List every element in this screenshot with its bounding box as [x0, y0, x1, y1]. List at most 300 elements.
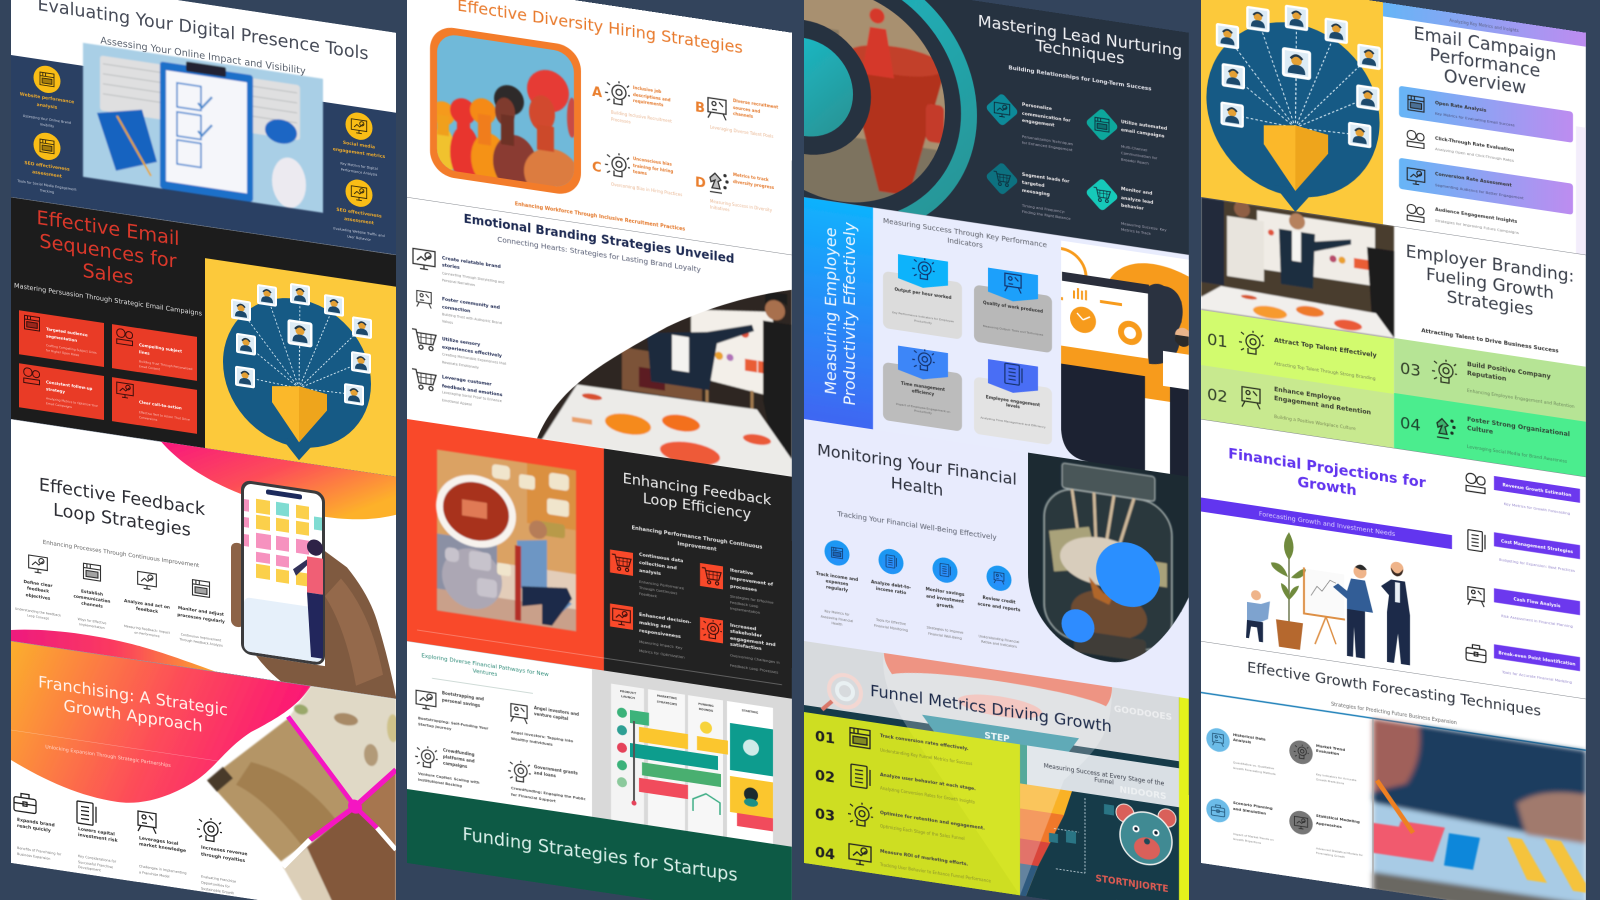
- item: Lowers capital investment risk: investment risk: [78, 832, 119, 844]
- item: Increased stakeholder engagement and satisfaction: engagement and: [730, 635, 776, 648]
- card: Audience Engagement Insights: Audience Engagement Insights: [1435, 207, 1517, 225]
- item: Leverage customer feedback and emotions: Emotional Appeal: [442, 398, 472, 407]
- card: Open Rate Analysis: Key Metrics for Evaluating Email Success: [1435, 110, 1515, 127]
- card: Quality of work produced: Measuring Output: Tools and Techniques: [983, 324, 1044, 337]
- item: Leverages local market knowledge: [138, 811, 187, 881]
- card: Time management efficiency: [883, 343, 962, 432]
- decorative ring and funnel photo: [701, 0, 977, 254]
- card: Quality of work produced: [974, 266, 1052, 353]
- item: Enhanced decision-making and responsiveness: [610, 603, 691, 661]
- title: Financial Projections for: [1228, 446, 1427, 492]
- item: Enhanced decision-making and responsiveness: Measuring Impact: Key: [639, 639, 683, 650]
- title: Employer Branding:: [1406, 242, 1574, 287]
- subtitle: Attracting Talent to Drive Business Success: [1421, 328, 1559, 355]
- item: Track income and expenses regularly: expenses: [826, 579, 849, 588]
- item: Segment leads for targeted messaging: Finding the Right Balance: [1022, 209, 1071, 221]
- block 04: Foster Strong Organizational Culture: Culture: [1467, 425, 1493, 436]
- photo: clipboard on desk: [83, 43, 323, 213]
- decorative wave: bottom left: [11, 630, 216, 672]
- card: Clear call-to-action: Effective Text to Action That Drive: [139, 410, 190, 422]
- item: Expands brand reach quickly: reach quickly: [17, 823, 51, 834]
- faint poster lettering: [984, 685, 1172, 803]
- item D: Metrics to track diversity progress: [695, 166, 775, 219]
- right metric: SEO effectiveness assessment: User Behavior: [347, 234, 372, 242]
- block 01: Attract Top Talent Effectively: Attracting Top Talent Through Strong Branding: [1274, 361, 1376, 382]
- card: Consistent follow-up strategy: strategy: [46, 386, 65, 394]
- item: Foster community and connection: connection: [442, 304, 470, 314]
- item: Personalize communication for engagement: for Enhanced Engagement: [1022, 140, 1073, 152]
- subtitle: Building Relationships for Long-Term Success: [1008, 65, 1152, 93]
- item: Define clear feedback objectives: Understanding the Feedback: [15, 607, 61, 618]
- card: Employee engagement levels: levels: [1006, 402, 1020, 409]
- item: Angel investors and venture capital: [511, 702, 579, 751]
- panel: Enhancing Feedback Loop Efficiency: [407, 419, 792, 699]
- item 04: Measure ROI of marketing efforts: [815, 839, 991, 887]
- item: Lowers capital investment risk: Successful Franchise: [78, 860, 113, 869]
- item: Personalize communication for engagement: communication for: [1022, 111, 1071, 124]
- item: Statistical Modeling Approaches: [1289, 809, 1364, 862]
- subtitle: Assessing Your Online Impact and Visibility: [100, 35, 306, 77]
- card: Output per hour worked: [883, 252, 962, 340]
- item 01: Track conversion rates effectively: Understanding Key Funnel Metrics for Success: [880, 747, 972, 766]
- item: Create relatable brand stories: stories: [442, 262, 460, 271]
- right metric: SEO effectiveness assessment: [334, 180, 384, 241]
- subtitle: Mastering Persuasion Through Strategic Email Campaigns: [14, 281, 203, 318]
- item: Utilize automated email campaigns: Utilize automated: [1121, 119, 1167, 132]
- item: Review credit score and reports: Understanding Financial: [979, 634, 1019, 644]
- item: Statistical Modeling Approaches: Statistical Modeling: [1316, 813, 1360, 824]
- yellow content block: [804, 712, 1020, 895]
- item: Personalize communication for engagement: [985, 90, 1073, 152]
- item: Track income and expenses regularly: regularly: [826, 584, 848, 594]
- item: Market Trend Evaluation: Growth Predictions: [1316, 777, 1345, 786]
- title: Effective Feedback: [39, 475, 206, 520]
- photo: hand holding phone: [231, 478, 396, 699]
- right metric: Social media engagement metrics: Performance Analysis: [341, 167, 377, 177]
- title: Growth: [1297, 475, 1357, 499]
- item: Analyze debt-to-income ratio: Analyze debt-to-: [871, 579, 911, 591]
- item: Increased stakeholder engagement and satisfaction: stakeholder: [730, 628, 763, 639]
- item: Monitor savings and investment growth: and investment: [926, 593, 964, 605]
- illustration: presenter at board: [1036, 237, 1191, 477]
- title: Franchising: A Strategic: [38, 672, 228, 720]
- bear mascot: [1116, 801, 1176, 869]
- photo: man with speech bubbles: [436, 449, 576, 631]
- item: Crowdfunding platforms and campaigns: [415, 743, 480, 791]
- item: Cost Management Strategies: Budgeting for Expansion: Best Practices: [1499, 557, 1575, 573]
- item: Iterative improvement of processes: [700, 563, 774, 617]
- item: Review credit score and reports: score and reports: [978, 601, 1021, 614]
- item D: Metrics to track diversity progress: Initiatives: [710, 204, 730, 212]
- framed photo: profiles of people: [430, 24, 581, 205]
- card: Click-Through Rate Evaluation: [1399, 122, 1573, 179]
- item: Monitor and analyze lead behavior: Monitor and: [1121, 186, 1152, 197]
- item: Monitor and adjust processes regularly: Monitor and adjust: [178, 605, 224, 618]
- block 01: Attract Top Talent Effectively: 01: [1207, 329, 1228, 351]
- item: Monitor savings and investment growth: growth: [936, 602, 954, 610]
- item: Market Trend Evaluation: Evaluation: [1316, 748, 1339, 756]
- item: Government grants and loans: Crowdfunding: Engaging the Public: [511, 786, 586, 801]
- item: Monitor savings and investment growth: Financial Well-Being: [928, 632, 962, 641]
- subtitle: Tracking Your Financial Well-Being Effectively: [836, 509, 997, 542]
- item: Cash Flow Analysis: Cash Flow Analysis: [1513, 596, 1561, 609]
- item: Define clear feedback objectives: [15, 553, 61, 623]
- item: Foster community and connection: Building Trust with Authentic Brand: [442, 312, 502, 325]
- item: Analyze debt-to-income ratio: income ratio: [876, 586, 906, 596]
- item: Increased stakeholder engagement and satisfaction: Increased: [730, 622, 757, 632]
- chart: startup roadmap board: [592, 669, 792, 849]
- item: Increased stakeholder engagement and satisfaction: satisfaction: [730, 641, 762, 652]
- subtitle: Enhancing Processes Through Continuous Improvement: [43, 540, 200, 569]
- item: Define clear feedback objectives: Define clear: [23, 579, 53, 589]
- item: Market Trend Evaluation: [1289, 739, 1356, 787]
- gradient header shape: [11, 641, 311, 803]
- card: Quality of work produced: Quality of work produced: [983, 300, 1043, 314]
- item: Define clear feedback objectives: feedback: [27, 585, 49, 595]
- card: Time management efficiency: Time management: [901, 381, 945, 392]
- item: Statistical Modeling Approaches: Forecasting Growth: [1316, 851, 1345, 859]
- item 03: Optimize for retention and engagement: Optimizing Each Stage of the Sales Funnel: [880, 823, 965, 841]
- item: Continuous data collection and analysis: Continuous data: [639, 552, 683, 564]
- item: Break-even Point Identification: Break-even Point Identification: [1498, 650, 1576, 667]
- title (rotated): [821, 217, 859, 407]
- column 3 of slides: [701, 0, 1191, 900]
- item: Iterative improvement of processes: improvement of: [730, 575, 774, 588]
- chart: startup roadmap board: PRODUCT: [620, 689, 637, 695]
- item: Increases revenue through royalties: Opportunities for: [201, 881, 230, 889]
- item: Segment leads for targeted messaging: targeted: [1022, 180, 1045, 189]
- item: Historical Data Analysis: Growth Forecasting Methods: [1233, 766, 1276, 776]
- item: Angel investors and venture capital: Angel Investors: Tapping into: [511, 730, 573, 743]
- item: Crowdfunding platforms and campaigns: Crowdfunding: [443, 747, 475, 757]
- right metric: SEO effectiveness assessment: SEO effectiveness: [336, 207, 382, 220]
- left metric: Website performance analysis: [20, 66, 74, 128]
- title: Strategies: [1447, 287, 1533, 320]
- card: Open Rate Analysis: Open Rate Analysis: [1435, 100, 1487, 114]
- panel: Funnel Metrics Driving Growth: [804, 641, 1189, 900]
- item: Leverage customer feedback and emotions: Leveraging Social Proof to Enhance: [442, 390, 502, 403]
- item: Establish communication channels: Implementation: [79, 622, 105, 630]
- item: Lowers capital investment risk: [77, 801, 119, 875]
- title: Effective Growth Forecasting Techniques: [1247, 659, 1541, 720]
- item: Continuous data collection and analysis: Feedback: [639, 591, 658, 599]
- item C: Unconscious bias training for hiring teams: training for hiring: [633, 163, 673, 174]
- item B: Diverse recruitment sources and channels: channels: [733, 111, 754, 119]
- item: Establish communication channels: Establish: [81, 589, 103, 598]
- card: Output per hour worked: Productivity: [914, 319, 932, 325]
- card: Targeted audience segmentation: segmentation: [46, 333, 77, 343]
- item B: Diverse recruitment sources and channels: sources and: [733, 105, 760, 114]
- card: Conversion Rate Assessment: Conversion Rate Assessment: [1435, 171, 1512, 189]
- item: Iterative improvement of processes: processes: [730, 583, 757, 594]
- item: Analyze and act on feedback: Analyze and act on: [124, 598, 170, 611]
- photo: team reviewing boards: [1201, 195, 1394, 339]
- block 04: Foster Strong Organizational Culture: 04: [1400, 413, 1421, 435]
- item: Angel investors and venture capital: Angel investors and: [534, 705, 579, 717]
- item: Bootstrapping and personal savings: Bootstrapping and: [442, 690, 484, 702]
- poster lettering: STORTNJIORTE: [1096, 873, 1169, 895]
- item: Scenario Planning and Simulation: Scenario Planning: [1233, 800, 1273, 811]
- column 2 of slides: [407, 0, 792, 900]
- block 03: Build Positive Company Reputation: Enhancing Employee Engagement and Retention: [1467, 388, 1575, 410]
- subtitle: Connecting Hearts: Strategies for Lasting Brand Loyalty: [497, 235, 701, 274]
- item A: Inclusive job descriptions and requirements: requirements: [633, 98, 664, 108]
- item: Revenue Growth Estimation: Revenue Growth Estimation: [1503, 482, 1571, 499]
- card: Targeted audience segmentation: Crafting Compelling Subject Lines: [46, 343, 97, 355]
- item: Analyze debt-to-income ratio: Financial Monitoring: [874, 624, 908, 633]
- title: Loop Strategies: [53, 500, 191, 541]
- item: Monitor and adjust processes regularly: Through Feedback Analysis: [178, 637, 223, 648]
- faint poster lettering: STEP: [984, 731, 1010, 745]
- card: Employee engagement levels: [974, 357, 1052, 445]
- item: Monitor and analyze lead behavior: Measuring Success: Key: [1121, 221, 1167, 232]
- item: Government grants and loans: [508, 759, 586, 808]
- photo: pen over printed chart: [1373, 719, 1586, 900]
- item: Cash Flow Analysis: Risk Assessment in Financial Planning: [1501, 613, 1573, 629]
- item: Analyze debt-to-income ratio: [871, 546, 911, 633]
- item 01: Track conversion rates effectively: Track conversion rates effectively.: [880, 733, 969, 752]
- item: Bootstrapping and personal savings: personal savings: [442, 697, 481, 708]
- item: Enhanced decision-making and responsiveness: Enhanced decision-: [639, 612, 691, 626]
- item C: Unconscious bias training for hiring teams: Overcoming Bias in Hiring Practices: [611, 182, 682, 197]
- item C: Unconscious bias training for hiring teams: teams: [633, 169, 647, 176]
- card: Compelling subject lines: lines: [139, 349, 150, 356]
- item: Cash Flow Analysis: [1468, 584, 1580, 630]
- item: Market Trend Evaluation: Key Indicators for Accurate: [1316, 772, 1356, 782]
- title: Sales: [82, 259, 134, 289]
- item: Crowdfunding platforms and campaigns: Venture Capital: Scaling with: [418, 772, 480, 785]
- item A: Inclusive job descriptions and requirements: Processes: [611, 117, 631, 125]
- item: Increases revenue through royalties: Increases revenue: [201, 845, 247, 857]
- item C: Unconscious bias training for hiring teams: [592, 149, 682, 197]
- item: Analyze and act on feedback: feedback: [136, 606, 158, 615]
- item: Historical Data Analysis: Analysis: [1233, 737, 1252, 745]
- item: Iterative improvement of processes: Strategies for Effective: [730, 593, 774, 605]
- item: Statistical Modeling Approaches: Approaches: [1316, 820, 1342, 829]
- item: Continuous data collection and analysis: Enhancing Performance: [639, 579, 685, 591]
- photo: team reviewing branding boards: [527, 245, 792, 480]
- item: Create relatable brand stories: Personal Narratives: [442, 278, 475, 287]
- item: Historical Data Analysis: Historical Data: [1233, 732, 1266, 742]
- item: Monitor savings and investment growth: Monitor savings: [926, 586, 965, 598]
- faint poster lettering: GOODOOES: [1114, 705, 1172, 723]
- title: Email Campaign: [1414, 24, 1556, 65]
- panel: Emotional Branding Strategies Unveiled: [407, 197, 792, 480]
- item: Statistical Modeling Approaches: Advanced Statistical Models for: [1316, 846, 1364, 857]
- item: Leverages local market knowledge: a Franchise Model: [139, 870, 170, 879]
- photo: jar with money and heart: [1028, 453, 1189, 677]
- panel: Effective Email Sequences for Sales: [11, 197, 396, 477]
- item: Define clear feedback objectives: Loop Concept: [27, 613, 50, 621]
- title: Emotional Branding Strategies Unveiled: [464, 212, 734, 266]
- right metric: Social media engagement metrics: engagement metrics: [333, 146, 385, 160]
- item: Expands brand reach quickly: Business Expansion: [17, 852, 50, 861]
- card: Targeted audience segmentation: for Higher Open Rates: [46, 348, 80, 357]
- item: Increased stakeholder engagement and satisfaction: Feedback Loop Processes: [730, 662, 778, 675]
- item: Review credit score and reports: [978, 563, 1021, 650]
- item: Foster community and connection: Values: [442, 319, 453, 325]
- panel: Effective Feedback Loop Strategies: [11, 419, 396, 699]
- block 04: Foster Strong Organizational Culture: [1394, 393, 1586, 477]
- item: Segment leads for targeted messaging: Segment leads for: [1022, 172, 1070, 185]
- item: Scenario Planning and Simulation: [1206, 796, 1274, 847]
- item 04: Measure ROI of marketing efforts: 04: [815, 845, 835, 864]
- item D: Metrics to track diversity progress: diversity progress: [733, 179, 775, 190]
- item: Scenario Planning and Simulation: and Simulation: [1233, 806, 1266, 816]
- translucent funnel overlay: [883, 653, 1112, 900]
- subtitle bar: Forecasting Growth and Investment Needs: [1259, 510, 1396, 538]
- item: Leverage customer feedback and emotions: [412, 369, 503, 411]
- illustration: lead funnel: [205, 258, 396, 477]
- item: Create relatable brand stories: Create relatable brand: [442, 255, 501, 270]
- item: Monitor savings and investment growth: Strategies to Improve: [927, 625, 963, 635]
- item: Monitor and analyze lead behavior: behavior: [1121, 203, 1144, 212]
- chart: startup roadmap board: ROUNDS: [699, 707, 713, 713]
- item: Utilize sensory experiences effectively: Utilize sensory: [442, 336, 480, 348]
- item: Utilize automated email campaigns: [1085, 105, 1167, 168]
- card: Employee engagement levels: Analyzing Time Management and Efficiency: [980, 415, 1046, 429]
- item: Utilize automated email campaigns: Communication for: [1121, 150, 1158, 161]
- panel: Financial Projections for Growth: [1201, 419, 1586, 699]
- item A: Inclusive job descriptions and requirements: descriptions and: [633, 92, 671, 103]
- block 04: Foster Strong Organizational Culture: Leveraging Social Media for Brand Awareness: [1467, 444, 1568, 465]
- card: Consistent follow-up strategy: Email Campaigns: [46, 401, 72, 409]
- item: Continuous data collection and analysis: [610, 547, 685, 603]
- item B: Diverse recruitment sources and channels: Diverse recruitment: [733, 98, 778, 110]
- item: Utilize automated email campaigns: Broader Reach: [1121, 157, 1149, 166]
- item D: Metrics to track diversity progress: D: [695, 175, 706, 192]
- item 03: Optimize for retention and engagement: 03: [815, 806, 835, 825]
- gradient header bar: Analyzing Key Metrics and Insights: [1449, 18, 1519, 33]
- card: Clear call-to-action: Conversions: [139, 415, 158, 422]
- subtitle: Indicators: [947, 236, 983, 250]
- item: Cost Management Strategies: [1468, 528, 1580, 574]
- item: Bootstrapping and personal savings: Startup Journey: [418, 722, 452, 731]
- subtitle: Ventures: [473, 668, 497, 678]
- title: Growth Approach: [64, 696, 202, 736]
- item 02: Analyze user behavior at each stage: 02: [815, 768, 835, 787]
- item: Utilize sensory experiences effectively: Resonate Emotionally: [442, 360, 479, 370]
- item 01: Track conversion rates effectively: 01: [815, 729, 835, 748]
- block 04: Foster Strong Organizational Culture: Foster Strong Organizational: [1467, 416, 1570, 438]
- title: Funding Strategies for Startups: [462, 825, 738, 886]
- chart: startup roadmap board: STARTING: [742, 708, 759, 715]
- left metric: Website performance analysis: Visibility: [40, 122, 54, 128]
- item: Lowers capital investment risk: Key Considerations for: [78, 854, 117, 864]
- block 01: Attract Top Talent Effectively: Attract Top Talent Effectively: [1274, 337, 1378, 359]
- item: Enhanced decision-making and responsiveness: Metrics for Optimization: [639, 648, 685, 660]
- subtitle: Funnel: [1094, 777, 1114, 787]
- item: Establish communication channels: channels: [81, 601, 103, 610]
- title: Enhancing Feedback: [623, 471, 772, 509]
- item: Expands brand reach quickly: Benefits of Franchising for: [17, 846, 62, 857]
- title: Mastering Lead Nurturing: [978, 11, 1182, 61]
- chart: startup roadmap board: STRATEGIES: [657, 699, 677, 707]
- column 4 of slides: [1201, 0, 1586, 900]
- item: Increased stakeholder engagement and satisfaction: [700, 617, 780, 675]
- block 02: Enhance Employee Engagement and Retention: Enhance Employee: [1274, 386, 1341, 403]
- left metric: Website performance analysis: analysis: [37, 102, 58, 111]
- item: Monitor and adjust processes regularly: processes regularly: [177, 612, 225, 625]
- item 02: Analyze user behavior at each stage: Analyze user behavior at each stage.: [880, 772, 976, 792]
- item: Increases revenue through royalties: Evaluating Franchise: [201, 875, 236, 884]
- card: Compelling subject lines: Email Content: [139, 364, 161, 371]
- title: Performance: [1430, 45, 1540, 82]
- item: Scenario Planning and Simulation: Growth Projections: [1233, 837, 1261, 845]
- left metric: SEO effectiveness assessment: [17, 132, 76, 194]
- item: Enhanced decision-making and responsiveness: responsiveness: [639, 628, 681, 640]
- item: Monitor and analyze lead behavior: analyze lead: [1121, 195, 1153, 206]
- item: Iterative improvement of processes: Feedback Loop: [730, 599, 759, 609]
- item: Utilize sensory experiences effectively: Creating Memorable Experiences that: [442, 352, 507, 366]
- title (rotated): Measuring Employee: [821, 226, 840, 396]
- card: Time management efficiency: Impact of Employee Engagement on: [896, 402, 950, 414]
- item: Leverage customer feedback and emotions: feedback and emotions: [442, 383, 503, 398]
- item: Establish communication channels: [74, 562, 110, 631]
- right metric: SEO effectiveness assessment: assessment: [344, 216, 375, 227]
- panel: Employer Branding: Fueling Growth Strategies: [1201, 195, 1586, 477]
- card: Clear call-to-action: [112, 377, 197, 434]
- right metric: SEO effectiveness assessment: Evaluating Website Traffic and: [333, 226, 385, 238]
- magnifier icon: [822, 672, 861, 716]
- block 01: Attract Top Talent Effectively: [1201, 310, 1394, 394]
- item: Foster community and connection: Foster community and: [442, 296, 500, 311]
- subtitle: Strategies for Predicting Future Business Expansion: [1331, 702, 1457, 726]
- item: Personalize communication for engagement: engagement: [1022, 118, 1055, 129]
- item: Bootstrapping and personal savings: Bootstrapping: Self-Funding Your: [418, 716, 489, 731]
- item B: Diverse recruitment sources and channels: [695, 92, 778, 140]
- card: Consistent follow-up strategy: [19, 363, 104, 420]
- chart: startup roadmap board: FUNDING: [698, 702, 714, 708]
- left metric: Website performance analysis: Website performance: [20, 91, 74, 105]
- item: Leverages local market knowledge: market knowledge: [139, 841, 186, 854]
- title band: [804, 641, 1179, 761]
- item: Analyze and act on feedback: [124, 569, 171, 640]
- chart: startup roadmap board: MARKETING: [657, 694, 678, 701]
- subtitle: Enhancing Performance Through Continuous: [632, 525, 762, 551]
- card: Consistent follow-up strategy: Consistent follow-up: [46, 379, 93, 391]
- card: Compelling subject lines: Building Trust Through Personalized: [139, 359, 192, 371]
- right metric: Social media engagement metrics: [333, 109, 385, 178]
- item: Continuous data collection and analysis: Through Continuous: [638, 585, 677, 596]
- item: Create relatable brand stories: [413, 248, 504, 292]
- card: Conversion Rate Assessment: Segmenting Audience for Better Engagement: [1435, 182, 1524, 200]
- item: Historical Data Analysis: [1206, 727, 1276, 776]
- card: Click-Through Rate Evaluation: Click-Through Rate Evaluation: [1435, 135, 1514, 153]
- right metric: Social media engagement metrics: Social media: [343, 140, 375, 151]
- item: Segment leads for targeted messaging: messaging: [1022, 188, 1050, 198]
- block 03: Build Positive Company Reputation: Build Positive Company: [1467, 361, 1552, 381]
- column 1 of slides: [11, 0, 399, 900]
- item D: Metrics to track diversity progress: Measuring Success in Diversity: [710, 198, 773, 213]
- card: Audience Engagement Insights: Strategies for Improving Future Campaigns: [1435, 218, 1519, 235]
- item: Establish communication channels: Ways for Effective: [78, 617, 106, 625]
- card: Clear call-to-action: Clear call-to-action: [139, 399, 182, 411]
- card: Employee engagement levels: Employee engagement: [986, 394, 1040, 407]
- item: Segment leads for targeted messaging: Timing and Frequency:: [1021, 203, 1065, 214]
- footer text: Enhancing Workforce Through Inclusive Recruitment Practices: [515, 201, 685, 233]
- item: Utilize automated email campaigns: email campaigns: [1121, 127, 1165, 140]
- item: Revenue Growth Estimation: [1466, 472, 1580, 517]
- panel: Evaluating Your Digital Presence Tools: [11, 0, 396, 255]
- item: Government grants and loans: Government grants: [534, 764, 578, 776]
- item: Track income and expenses regularly: Health: [831, 621, 843, 627]
- faint poster lettering: NIDOORS: [1119, 785, 1167, 802]
- item: Market Trend Evaluation: Market Trend: [1316, 743, 1345, 752]
- item: Monitor and adjust processes regularly: Continuous Improvement: [181, 632, 222, 643]
- item: Create relatable brand stories: Connecting Through Storytelling and: [442, 271, 504, 285]
- title: Funnel Metrics Driving Growth: [870, 681, 1112, 736]
